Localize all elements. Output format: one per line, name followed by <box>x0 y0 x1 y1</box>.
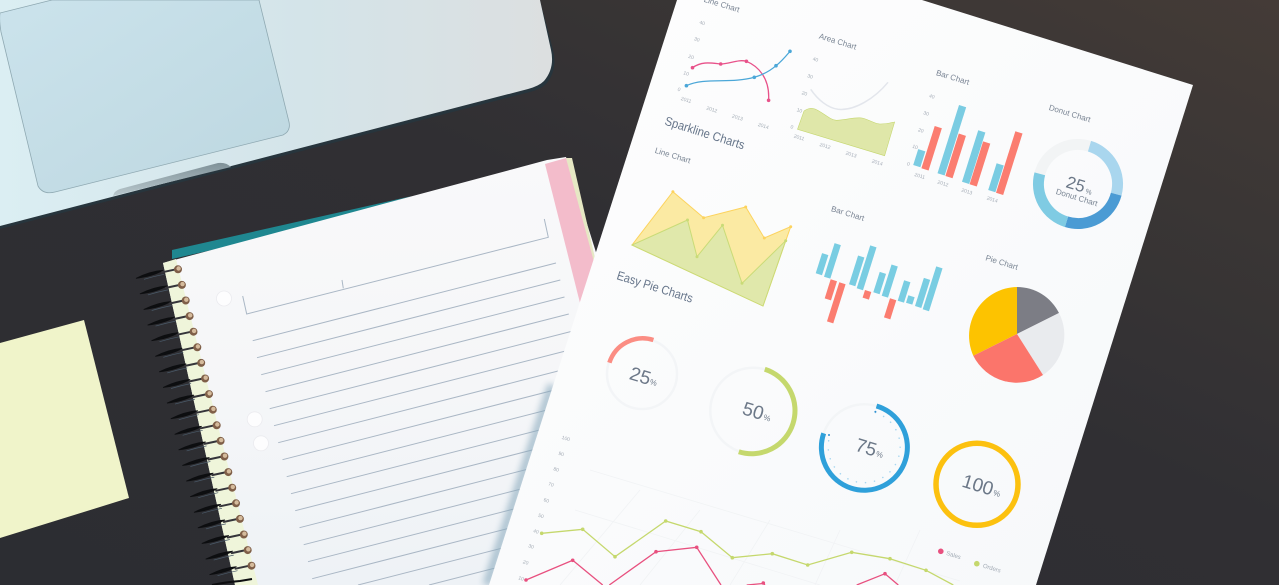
y axis labels <box>677 20 706 93</box>
notebook page <box>163 157 610 585</box>
red bars <box>921 126 1023 195</box>
laptop notch <box>113 163 231 196</box>
multi line chart <box>517 435 1001 585</box>
laptop <box>0 0 554 229</box>
gauge 75 percent: 75 <box>853 435 879 461</box>
y axis labels <box>517 435 571 583</box>
gauge 25 percent: % <box>649 377 658 388</box>
axis labels: 2014 <box>986 196 998 205</box>
y axis labels: 30 <box>693 36 700 44</box>
gauge 25 percent <box>607 338 677 409</box>
area line chart <box>632 146 792 306</box>
x axis labels <box>680 96 770 131</box>
axis labels <box>789 56 883 168</box>
printed chart sheet <box>487 0 1193 585</box>
axis labels: 30 <box>806 73 814 81</box>
axis labels: 10 <box>911 144 919 151</box>
pie chart <box>969 253 1064 383</box>
chart title: Line Chart <box>654 146 692 166</box>
y axis labels: 90 <box>558 451 565 458</box>
gauge 50 percent <box>710 368 796 454</box>
legend: Sales <box>945 551 961 561</box>
y axis labels: 30 <box>527 543 535 551</box>
y axis labels: 50 <box>537 513 545 520</box>
donut caption: Donut Chart <box>1055 187 1099 208</box>
y axis labels: 20 <box>687 54 695 61</box>
y axis labels: 10 <box>682 70 690 78</box>
donut value: 25 % <box>1064 173 1095 199</box>
axis labels: 40 <box>928 93 935 101</box>
y axis labels: 60 <box>543 497 550 505</box>
pink series <box>691 60 770 102</box>
axis labels: 20 <box>917 127 924 135</box>
y axis labels: 80 <box>553 466 560 474</box>
y axis labels: 10 <box>517 575 525 583</box>
chart title: Bar Chart <box>830 204 866 223</box>
positive negative bar chart <box>816 204 943 323</box>
axis labels: 2011 <box>793 134 805 143</box>
notebook spine strip <box>163 259 258 585</box>
blue bars <box>913 105 1004 192</box>
gauge 25 percent: 25 <box>627 364 653 390</box>
notebook header box <box>243 219 548 314</box>
heading: sparkline charts: Sparkline Charts <box>663 114 746 152</box>
gauge 50 percent: 50 <box>740 399 766 425</box>
y axis labels: 20 <box>522 559 529 567</box>
axis labels: 30 <box>922 110 930 118</box>
gauge 100 percent: % <box>992 488 1001 499</box>
axis labels: 2012 <box>819 142 831 151</box>
x axis labels: 2013 <box>731 114 744 123</box>
area chart <box>789 32 895 168</box>
heading: easy pie charts: Easy Pie Charts <box>615 269 695 306</box>
y axis labels: 40 <box>532 528 540 536</box>
sales line <box>524 546 898 585</box>
chart title: Donut Chart <box>1048 103 1092 124</box>
x axis labels: 2014 <box>757 122 770 131</box>
notebook teal cover <box>172 196 412 259</box>
notebook <box>136 157 624 585</box>
axis labels: 2012 <box>937 180 949 189</box>
grey curve <box>811 82 888 109</box>
green series <box>632 220 786 306</box>
chart title: Bar Chart <box>935 68 971 87</box>
series markers <box>671 190 792 285</box>
axis labels: 10 <box>796 107 803 115</box>
notebook ruled lines <box>253 263 624 585</box>
laptop trackpad <box>0 0 289 193</box>
donut ring <box>1038 144 1118 224</box>
notebook spiral binding <box>136 265 256 585</box>
axis labels: 20 <box>801 90 808 98</box>
chart title: Area Chart <box>818 32 858 52</box>
y axis labels: 0 <box>677 87 681 93</box>
sticky note <box>0 320 129 538</box>
axis labels <box>906 93 998 205</box>
pie slices <box>969 287 1064 383</box>
axis labels: 2013 <box>845 151 857 160</box>
y axis labels: 100 <box>561 435 571 443</box>
gauge 50 percent: % <box>762 413 772 423</box>
yellow series <box>632 192 791 306</box>
notebook punched holes <box>216 291 268 451</box>
axis labels: 0 <box>789 124 794 131</box>
blue series <box>685 50 792 87</box>
axis labels: 2011 <box>914 172 926 181</box>
gauge 100 percent: 100 <box>959 471 996 500</box>
notebook pink tab <box>545 158 594 303</box>
legend: Orders <box>982 563 1001 575</box>
axis labels: 0 <box>906 161 911 168</box>
green area <box>798 108 895 156</box>
sparkline line chart <box>677 0 792 131</box>
axis labels: 2014 <box>871 159 883 168</box>
notebook layered edge <box>566 158 595 272</box>
gauge 100 percent <box>936 443 1018 525</box>
axis labels: 40 <box>812 56 819 64</box>
chart title: Pie Chart <box>984 253 1020 272</box>
donut chart <box>1038 103 1118 224</box>
gauge 75 percent <box>821 404 907 490</box>
grouped bar chart <box>906 68 1023 205</box>
x axis labels: 2011 <box>680 96 692 105</box>
y axis labels: 70 <box>547 481 555 489</box>
legend <box>938 548 1001 575</box>
gauge 75 percent: % <box>875 449 884 460</box>
y axis labels: 40 <box>699 20 706 27</box>
red bars <box>825 279 896 323</box>
x axis labels: 2012 <box>705 106 718 115</box>
orders line <box>540 519 953 585</box>
blue bars <box>816 243 943 311</box>
axis labels: 2013 <box>960 188 973 197</box>
